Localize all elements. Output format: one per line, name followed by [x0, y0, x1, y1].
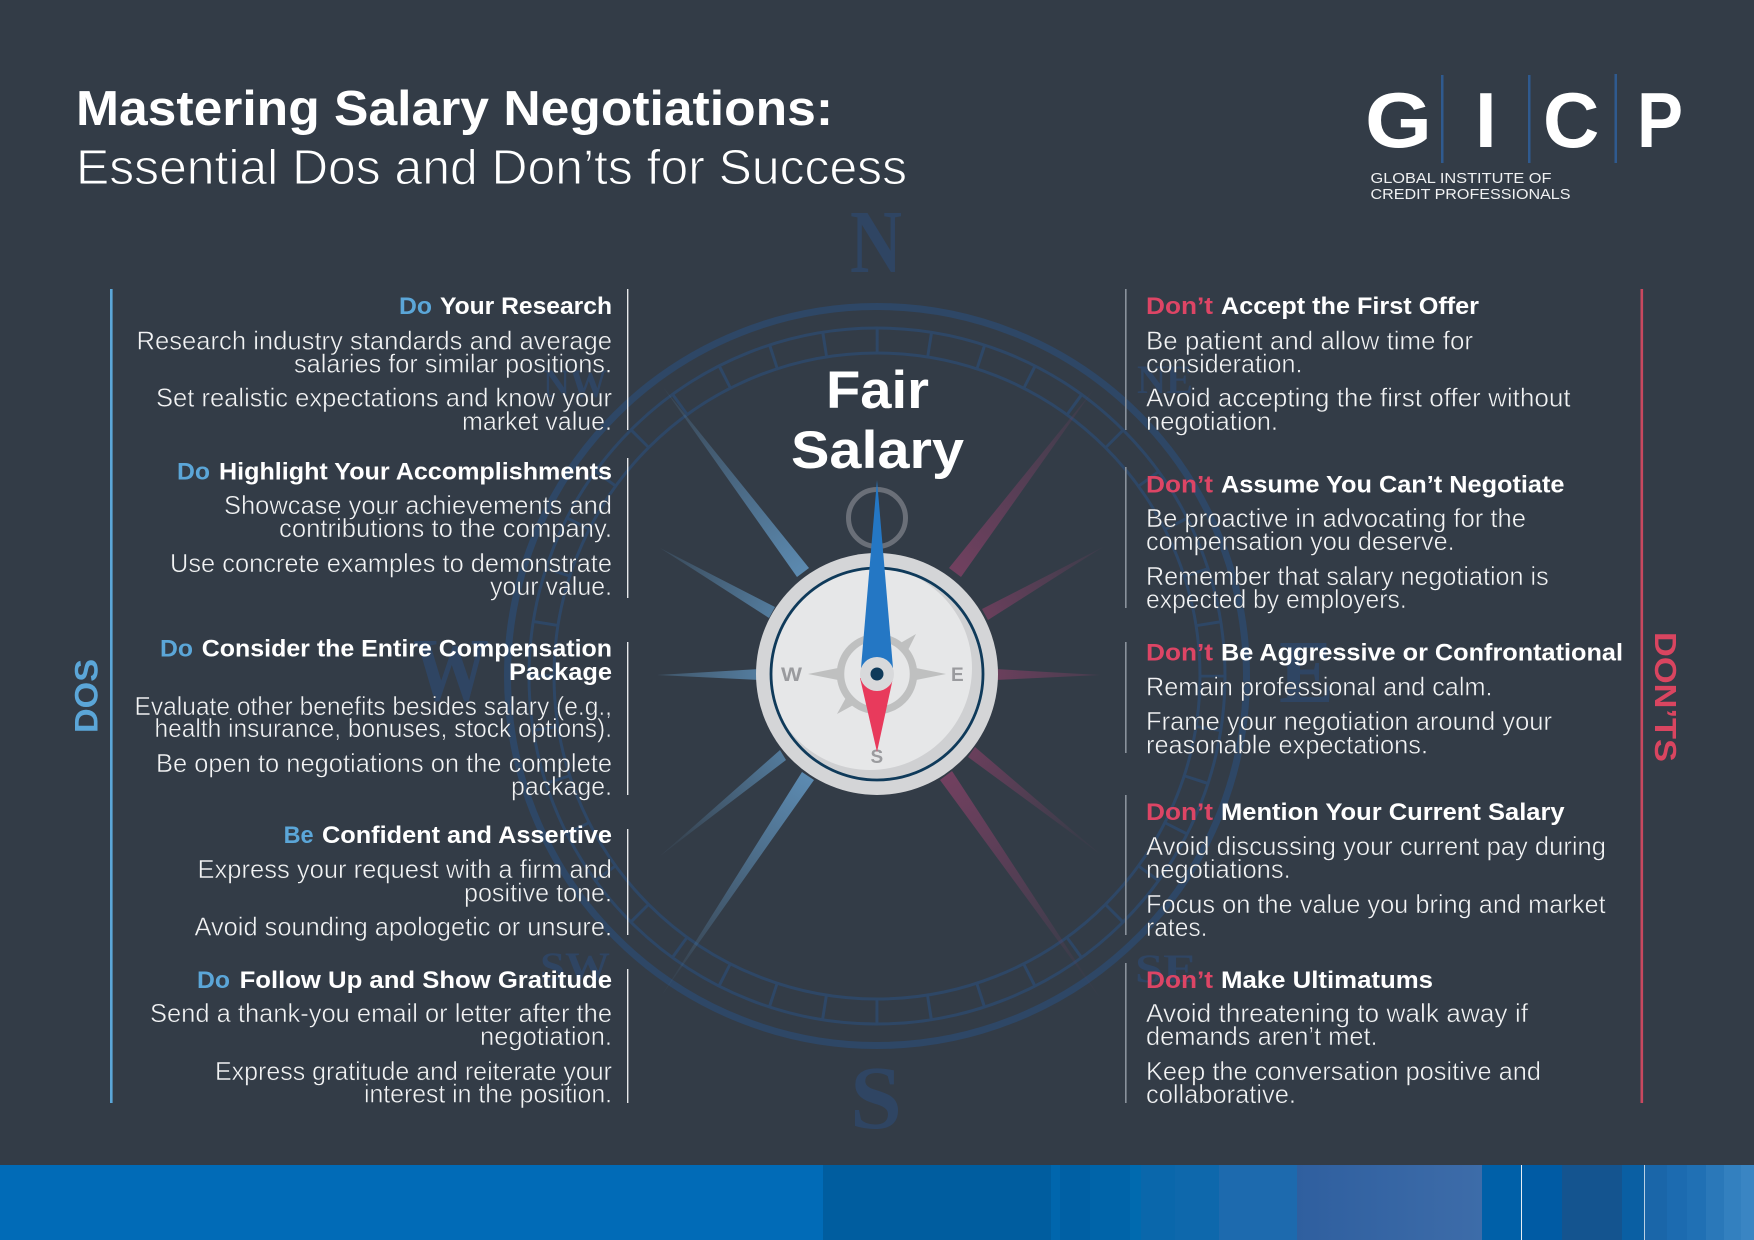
- panel: Don't Mention Your Current Salary: [1125, 795, 1606, 942]
- background compass dial: S: [850, 1049, 902, 1148]
- icon: compass: [756, 480, 998, 795]
- heading: Do Follow Up and Show Gratitude: Follow Up and Show Gratitude: [240, 967, 612, 994]
- heading: Be Confident and Assertive: Be: [284, 822, 314, 849]
- text: ultimatums advice: [1146, 998, 1541, 1109]
- heading: Don't Make Ultimatums: [1146, 967, 1433, 994]
- panel: Don't Be Aggressive or Confrontational: [1125, 640, 1623, 759]
- background compass dial: [413, 193, 1334, 1148]
- text: research advice: Research industry standards and average: [136, 325, 612, 355]
- text: compensation advice: Be open to negotiations on the complete: [156, 748, 612, 778]
- text: negotiate advice: expected by employers.: [1146, 584, 1407, 614]
- heading: Do Your Research: Do: [399, 293, 432, 320]
- logo: GICP: GLOBAL INSTITUTE OF: [1370, 170, 1552, 187]
- heading: Don't Be Aggressive or Confrontational: Don’t: [1146, 640, 1213, 667]
- text: ultimatums advice: demands aren’t met.: [1146, 1021, 1378, 1051]
- panel: Don't Accept the First Offer: [1125, 289, 1571, 436]
- heading: Do Highlight Your Accomplishments: Do: [177, 458, 210, 485]
- text: accomplishments advice: Use concrete examples to demonstrate: [170, 548, 612, 578]
- heading: Don't Accept the First Offer: Accept the First Offer: [1221, 293, 1479, 320]
- text: gratitude advice: Express gratitude and reiterate your: [215, 1056, 612, 1086]
- logo: GICP: I: [1475, 76, 1497, 164]
- text: negotiate advice: [1146, 503, 1549, 614]
- text: research advice: market value.: [462, 406, 612, 436]
- background compass dial: E: [1279, 623, 1334, 722]
- text: gratitude advice: interest in the position.: [364, 1079, 612, 1109]
- title: Essential Dos and Don’ts for Success: [76, 141, 907, 195]
- text: aggression advice: reasonable expectations.: [1146, 729, 1428, 759]
- text: compensation advice: Evaluate other benefits besides salary (e.g.,: [134, 691, 612, 721]
- text: current salary advice: Focus on the value you bring and market: [1146, 889, 1606, 919]
- compass rays: red side: [940, 389, 1103, 998]
- DON'TS side label: DON’TS: [1648, 632, 1683, 762]
- text: compensation advice: [134, 691, 612, 801]
- heading: Do Consider the Entire Compensation Package: Package: [509, 659, 612, 686]
- text: aggression advice: Frame your negotiation around your: [1146, 706, 1552, 736]
- text: confidence advice: Express your request with a firm and: [198, 854, 612, 884]
- text: first offer advice: Be patient and allow time for: [1146, 325, 1473, 355]
- text: gratitude advice: [150, 998, 612, 1109]
- panel: Don't Assume You Can't Negotiate: [1125, 467, 1564, 614]
- Fair Salary heading: Fair: [826, 361, 929, 420]
- text: negotiate advice: compensation you deserve.: [1146, 526, 1455, 556]
- text: current salary advice: Avoid discussing your current pay during: [1146, 831, 1606, 861]
- icon: compass: W: [781, 665, 802, 686]
- text: negotiate advice: Remember that salary negotiation is: [1146, 561, 1549, 591]
- background compass dial: NE: [1137, 357, 1193, 402]
- background compass dial: N: [850, 193, 902, 292]
- text: first offer advice: Avoid accepting the first offer without: [1146, 383, 1571, 413]
- panel: Do Highlight Your Accomplishments: [170, 458, 628, 601]
- text: ultimatums advice: Keep the conversation positive and: [1146, 1056, 1541, 1086]
- panel: Don't Make Ultimatums: [1125, 963, 1541, 1109]
- heading: Don't Assume You Can't Negotiate: Don’t: [1146, 471, 1213, 498]
- text: current salary advice: rates.: [1146, 912, 1208, 942]
- logo: GICP: CREDIT PROFESSIONALS: [1370, 186, 1570, 203]
- text: confidence advice: positive tone.: [464, 878, 612, 908]
- heading: Don't Mention Your Current Salary: Don’t: [1146, 799, 1213, 826]
- logo: GICP: P: [1637, 76, 1683, 164]
- text: accomplishments advice: your value.: [490, 571, 612, 601]
- compass rays: blue side: [657, 387, 814, 995]
- background compass dial: SW: [540, 944, 610, 989]
- Fair Salary heading: [791, 361, 965, 480]
- text: first offer advice: consideration.: [1146, 348, 1302, 378]
- text: gratitude advice: negotiation.: [480, 1021, 612, 1051]
- text: accomplishments advice: [170, 490, 612, 601]
- Fair Salary heading: Salary: [791, 421, 965, 480]
- heading: Don't Make Ultimatums: Don’t: [1146, 967, 1213, 994]
- background compass dial: NW: [543, 361, 607, 406]
- text: first offer advice: negotiation.: [1146, 406, 1278, 436]
- text: ultimatums advice: collaborative.: [1146, 1079, 1296, 1109]
- text: accomplishments advice: Showcase your achievements and: [224, 490, 612, 520]
- heading: Do Consider the Entire Compensation Package: [160, 636, 612, 686]
- text: accomplishments advice: contributions to the company.: [279, 513, 612, 543]
- text: confidence advice: [194, 854, 612, 942]
- heading: Don't Be Aggressive or Confrontational: Be Aggressive or Confrontational: [1221, 640, 1623, 667]
- icon: compass: E: [951, 665, 964, 686]
- heading: Don't Assume You Can't Negotiate: Assume You Can’t Negotiate: [1221, 471, 1564, 498]
- panel: Do Your Research: [136, 289, 628, 436]
- logo: GICP: G: [1365, 76, 1432, 164]
- text: compensation advice: health insurance, bonuses, stock options).: [154, 713, 612, 743]
- heading: Do Highlight Your Accomplishments: Highlight Your Accomplishments: [219, 458, 612, 485]
- logo: GICP: C: [1543, 76, 1599, 164]
- text: gratitude advice: Send a thank-you email or letter after the: [150, 998, 612, 1028]
- heading: Do Your Research: Your Research: [440, 293, 612, 320]
- panel: Be Confident and Assertive: [194, 822, 628, 942]
- heading: Don't Make Ultimatums: Make Ultimatums: [1221, 967, 1433, 994]
- heading: Do Consider the Entire Compensation Package: Do: [160, 636, 193, 663]
- text: aggression advice: Remain professional and calm.: [1146, 671, 1492, 701]
- text: research advice: Set realistic expectations and know your: [156, 383, 612, 413]
- footer colour band: [0, 1165, 1754, 1240]
- heading: Be Confident and Assertive: Confident and Assertive: [322, 822, 612, 849]
- text: compensation advice: package.: [511, 771, 612, 801]
- text: ultimatums advice: Avoid threatening to walk away if: [1146, 998, 1529, 1028]
- text: current salary advice: [1146, 831, 1606, 942]
- panel: Do Follow Up and Show Gratitude: [150, 967, 628, 1109]
- text: research advice: salaries for similar positions.: [294, 348, 612, 378]
- text: aggression advice: [1146, 671, 1552, 759]
- background compass dial: SE: [1135, 946, 1197, 991]
- text: first offer advice: [1146, 325, 1571, 436]
- DOS side label: DOS: [68, 659, 104, 733]
- background compass dial: W: [413, 621, 489, 720]
- text: negotiate advice: Be proactive in advocating for the: [1146, 503, 1526, 533]
- text: current salary advice: negotiations.: [1146, 854, 1291, 884]
- heading: Don't Accept the First Offer: Don’t: [1146, 293, 1213, 320]
- text: confidence advice: Avoid sounding apologetic or unsure.: [194, 912, 612, 942]
- panel: Do Consider the Entire Compensation Package: [134, 636, 628, 801]
- icon: compass: S: [870, 747, 883, 768]
- text: research advice: [136, 325, 612, 436]
- heading: Do Consider the Entire Compensation Package: Consider the Entire Compensation: [202, 636, 612, 663]
- logo: GICP: [1365, 74, 1683, 203]
- heading: Don't Mention Your Current Salary: Mention Your Current Salary: [1221, 799, 1565, 826]
- title: [76, 82, 907, 195]
- heading: Do Follow Up and Show Gratitude: Do: [197, 967, 230, 994]
- title: Mastering Salary Negotiations:: [76, 82, 833, 136]
